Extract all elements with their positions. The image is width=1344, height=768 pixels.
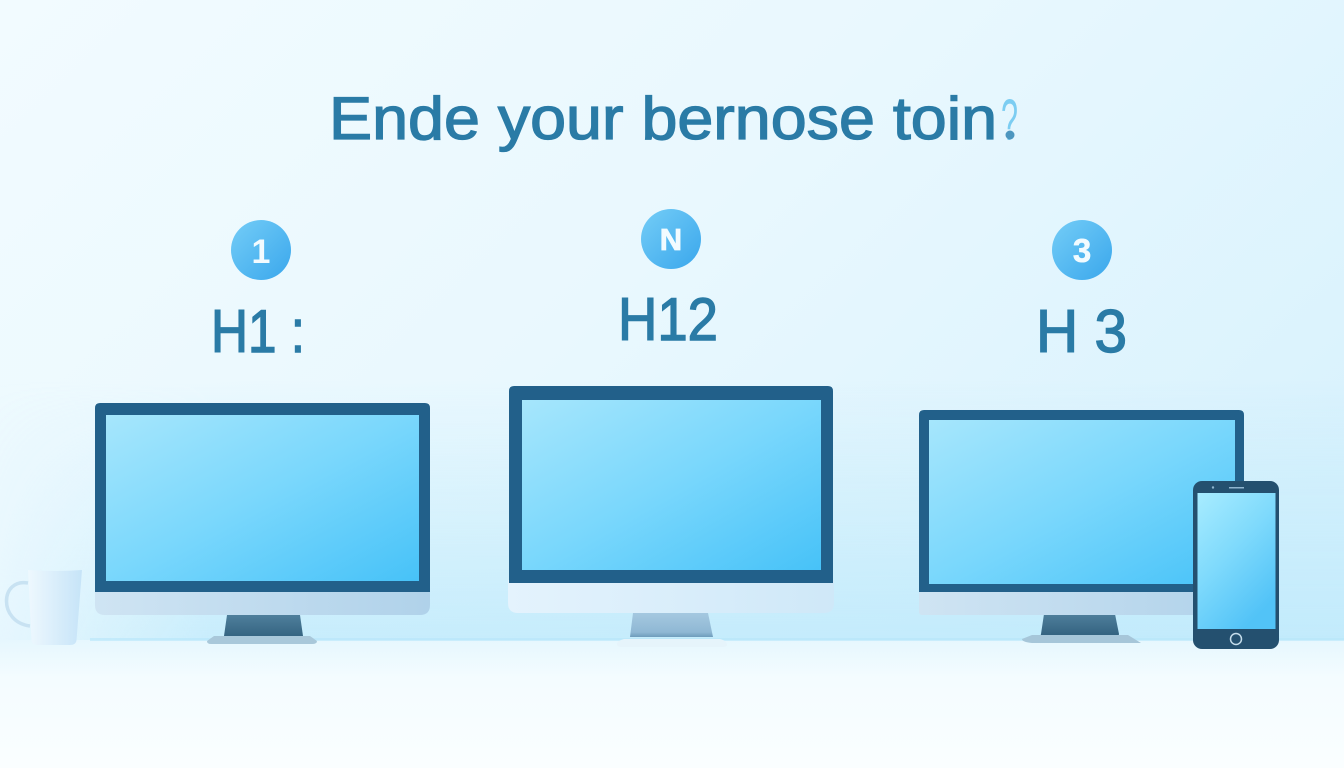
- floor: [0, 638, 1344, 768]
- monitor 3: [919, 410, 1244, 643]
- number badge 3: [1052, 220, 1112, 280]
- title: Ende your bernose toin: [329, 85, 997, 152]
- heading H12: H12: [618, 286, 718, 353]
- heading H1: H1 :: [211, 298, 305, 365]
- monitor 2: [508, 386, 834, 647]
- title: ?: [1001, 88, 1018, 153]
- number badge 1: [231, 220, 291, 280]
- number badge N: N: [660, 222, 682, 257]
- number badge 3: 3: [1073, 232, 1091, 269]
- heading H3: H 3: [1036, 298, 1127, 365]
- number badge 1: 1: [252, 233, 270, 271]
- icon: smartphone: [1193, 481, 1279, 649]
- icon: coffee mug: [6, 570, 82, 645]
- number badge N: [641, 209, 701, 269]
- monitor 1: [95, 403, 430, 644]
